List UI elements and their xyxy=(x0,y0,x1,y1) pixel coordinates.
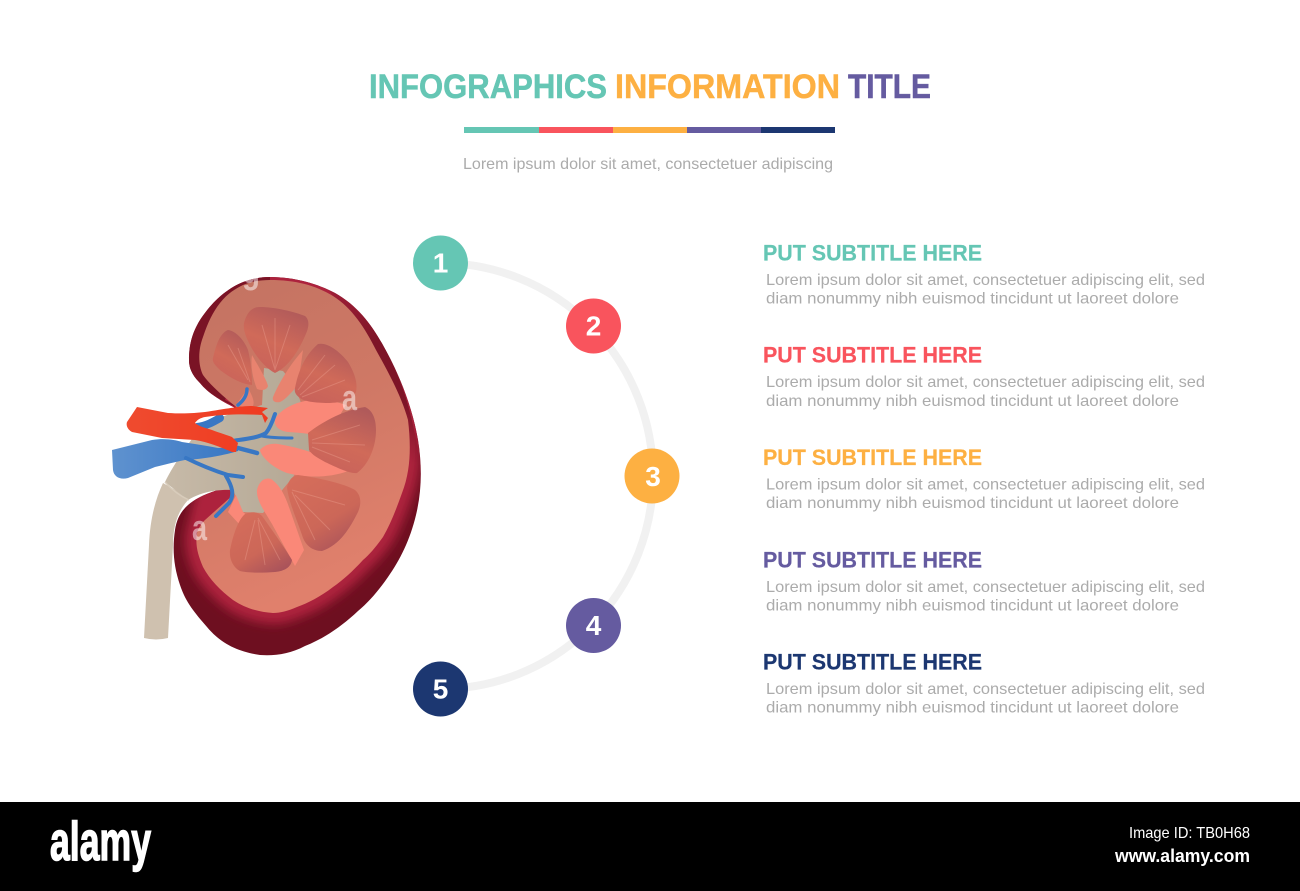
step 5 marker xyxy=(413,662,468,716)
text block 3: Lorem ipsum dolor sit amet, consectetuer adipiscing elit, sed xyxy=(766,476,1205,494)
step 4 marker: 4 xyxy=(586,610,602,641)
title: INFORMATION xyxy=(615,68,840,106)
pyramids xyxy=(213,307,376,573)
ureter xyxy=(144,483,190,640)
text block 2: Lorem ipsum dolor sit amet, consectetuer adipiscing elit, sed xyxy=(766,374,1205,391)
text block 4: Lorem ipsum dolor sit amet, consectetuer adipiscing elit, sed xyxy=(766,579,1205,596)
text block 5: PUT SUBTITLE HERE xyxy=(763,650,982,674)
vein branches xyxy=(186,389,292,516)
watermark letters on kidney xyxy=(192,250,358,548)
upper papillae xyxy=(236,350,303,407)
step 5 marker: 5 xyxy=(433,674,448,704)
renal artery xyxy=(127,406,268,452)
text block 4 xyxy=(763,548,1205,614)
watermark letters on kidney: g xyxy=(242,250,260,291)
text block 2: PUT SUBTITLE HERE xyxy=(763,342,982,368)
website: www.alamy.com xyxy=(1114,846,1250,866)
text block 1: Lorem ipsum dolor sit amet, consectetuer adipiscing elit, sed xyxy=(766,272,1205,289)
image id: Image ID: TB0H68 xyxy=(1129,825,1250,842)
step 4 marker xyxy=(566,598,621,653)
text block 4: PUT SUBTITLE HERE xyxy=(763,548,982,572)
kidney illustration xyxy=(112,277,421,656)
renal pelvis xyxy=(165,368,310,513)
timeline arc xyxy=(440,263,653,689)
text block 5 xyxy=(763,650,1205,716)
watermark letters on kidney: a xyxy=(192,507,208,548)
footer bar xyxy=(0,802,1300,891)
step 2 marker xyxy=(566,298,621,354)
step 2 marker: 2 xyxy=(586,310,601,342)
pyramid streaks xyxy=(228,318,365,565)
text block 4: diam nonummy nibh euismod tincidunt ut laoreet dolore xyxy=(766,598,1179,614)
text block 5: Lorem ipsum dolor sit amet, consectetuer adipiscing elit, sed xyxy=(766,681,1205,698)
kidney outer capsule xyxy=(174,277,421,656)
step 3 marker xyxy=(624,448,680,504)
text block 3: PUT SUBTITLE HERE xyxy=(763,445,982,470)
kidney cortex xyxy=(196,280,410,613)
alamy logo: alamy xyxy=(50,810,151,872)
text block 5: diam nonummy nibh euismod tincidunt ut laoreet dolore xyxy=(766,700,1179,716)
title: TITLE xyxy=(848,68,931,106)
papillae xyxy=(228,400,348,566)
text block 1: diam nonummy nibh euismod tincidunt ut laoreet dolore xyxy=(766,290,1179,308)
title: INFOGRAPHICS xyxy=(369,68,607,106)
text block 2 xyxy=(763,342,1205,410)
watermark letters on kidney: a xyxy=(342,377,358,418)
step 3 marker: 3 xyxy=(645,461,661,492)
pelvis neck ridge xyxy=(165,482,189,500)
text block 2: diam nonummy nibh euismod tincidunt ut laoreet dolore xyxy=(766,393,1179,410)
text block 3 xyxy=(763,445,1205,512)
step 1 marker: 1 xyxy=(433,248,448,278)
title xyxy=(369,68,931,106)
text block 3: diam nonummy nibh euismod tincidunt ut laoreet dolore xyxy=(766,495,1179,512)
text block 1 xyxy=(763,240,1205,308)
renal vein xyxy=(112,439,238,479)
title subtext: Lorem ipsum dolor sit amet, consectetuer adipiscing xyxy=(463,156,833,173)
text block 1: PUT SUBTITLE HERE xyxy=(763,240,982,266)
step 1 marker xyxy=(413,236,468,290)
title colour bar xyxy=(464,127,835,133)
